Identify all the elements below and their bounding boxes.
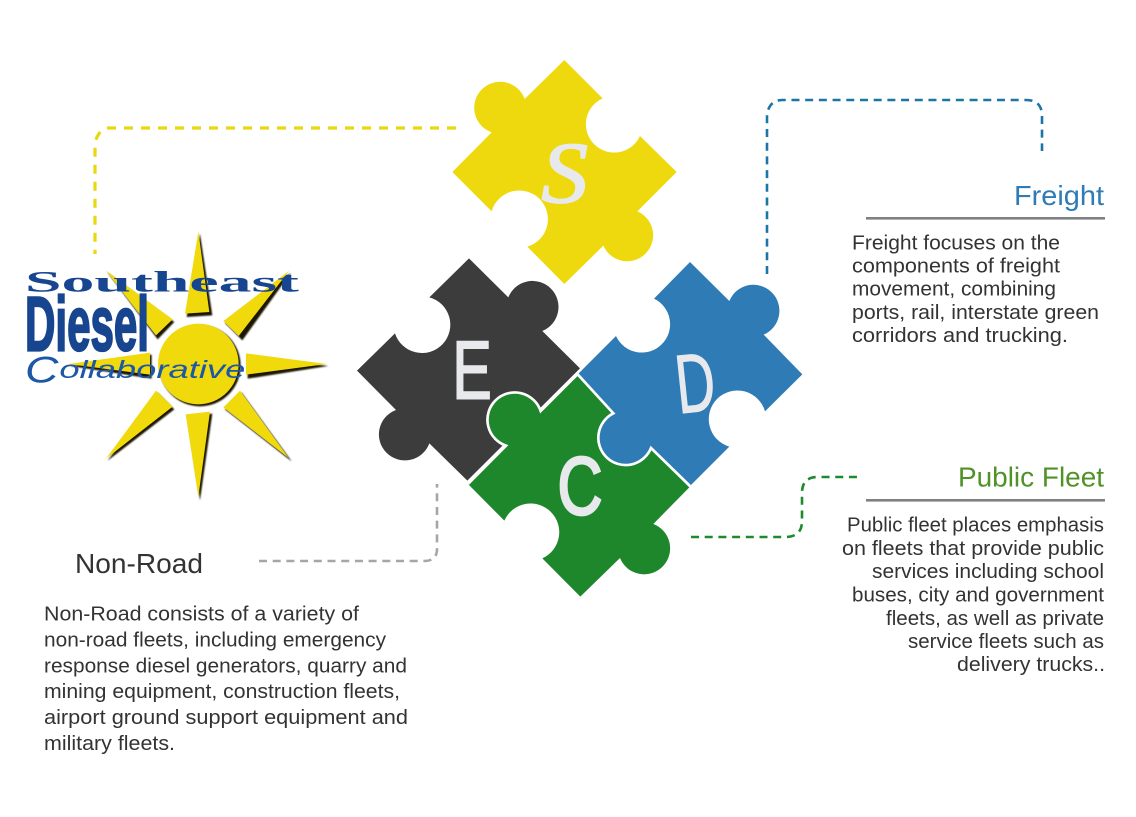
connector: blue dashed line from D piece to Freight xyxy=(767,100,1042,274)
text block: Non-Road description: response diesel generators, quarry and xyxy=(44,654,407,678)
logo text: Collaborative: ollaborative xyxy=(59,357,245,384)
text block: Freight description: components of freight xyxy=(852,254,1060,278)
rule: Freight xyxy=(866,217,1105,220)
puzzle piece D: blue: D xyxy=(671,335,720,431)
puzzle piece D: blue xyxy=(578,262,802,486)
puzzle piece S: yellow xyxy=(452,60,677,284)
heading: Non-Road: Non-Road xyxy=(75,548,203,579)
puzzle piece E: dark grey xyxy=(357,258,580,481)
text block: Public Fleet description: Public fleet places emphasis xyxy=(847,514,1104,536)
icon: sun with rays xyxy=(68,232,328,500)
text block: Public Fleet description: services including school xyxy=(872,560,1104,583)
text block: Public Fleet description: delivery trucks.. xyxy=(957,653,1105,676)
connector: grey dashed line from E piece to Non-Road xyxy=(259,484,437,561)
text block: Public Fleet description: on fleets that provide public xyxy=(842,537,1104,560)
logo text: Diesel: Diesel xyxy=(25,281,149,367)
panel: Freight xyxy=(852,180,1105,347)
puzzle piece C: green xyxy=(468,375,689,597)
heading: Freight: Freight xyxy=(1014,180,1104,211)
logo: Southeast Diesel Collaborative sun xyxy=(25,232,328,500)
text block: Public Fleet description: buses, city and government xyxy=(852,584,1104,606)
puzzle piece C: green: C xyxy=(557,441,602,532)
heading: Public Fleet: Public Fleet xyxy=(958,462,1104,492)
connector: green dashed line from C piece to Public Fleet xyxy=(691,477,862,537)
rule: Public Fleet xyxy=(866,499,1105,502)
text block: Non-Road description xyxy=(44,602,408,755)
text block: Public Fleet description xyxy=(842,514,1105,676)
panel: Non-Road xyxy=(44,548,408,755)
logo text: Southeast: Southeast xyxy=(25,266,299,298)
text block: Non-Road description: non-road fleets, including emergency xyxy=(44,628,387,652)
text block: Freight description: movement, combining xyxy=(852,278,1056,300)
connector: yellow dashed line from S piece to logo xyxy=(95,128,456,254)
logo text: Collaborative: C xyxy=(25,348,60,390)
text block: Freight description: ports, rail, interstate green xyxy=(852,301,1099,324)
puzzle piece E: dark grey: E xyxy=(452,324,492,417)
text block: Freight description: Freight focuses on the xyxy=(852,232,1060,254)
text block: Public Fleet description: service fleets such as xyxy=(908,630,1104,653)
puzzle piece S: yellow: S xyxy=(541,124,588,221)
text block: Non-Road description: Non-Road consists of a variety of xyxy=(44,602,359,626)
text block: Freight description xyxy=(852,232,1099,347)
text block: Freight description: corridors and trucking. xyxy=(852,324,1068,347)
text block: Non-Road description: mining equipment, construction fleets, xyxy=(44,680,400,703)
logo text: Collaborative xyxy=(25,348,245,390)
text block: Non-Road description: military fleets. xyxy=(44,732,175,755)
text block: Non-Road description: airport ground support equipment and xyxy=(44,706,408,729)
text block: Public Fleet description: fleets, as well as private xyxy=(886,607,1104,630)
panel: Public Fleet xyxy=(842,462,1105,676)
